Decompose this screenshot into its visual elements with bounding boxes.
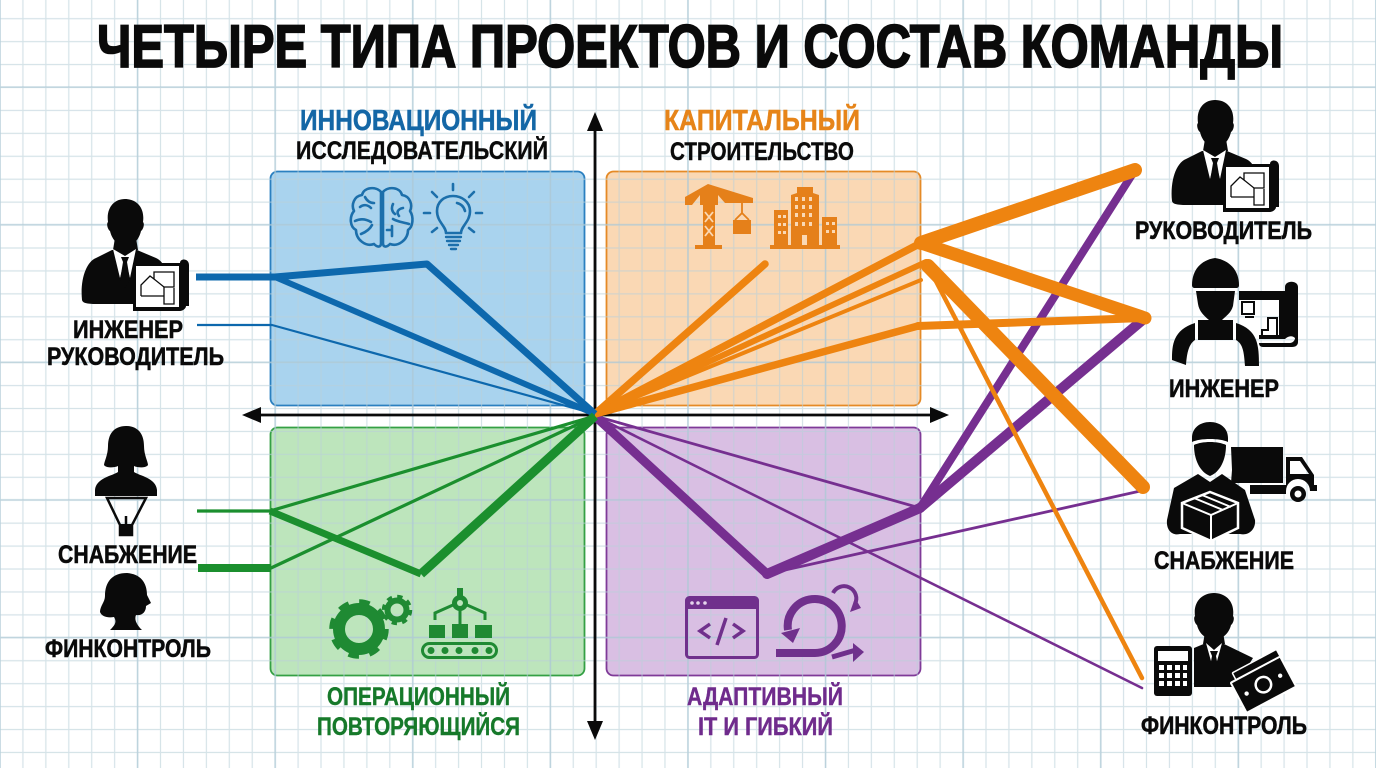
icon: light bulb bbox=[424, 184, 482, 249]
heading: capital quadrant: СТРОИТЕЛЬСТВО bbox=[670, 138, 854, 166]
icon: gears bbox=[332, 596, 410, 656]
heading: operational quadrant: ПОВТОРЯЮЩИЙСЯ bbox=[317, 711, 520, 741]
heading: adaptive quadrant bbox=[687, 681, 843, 741]
icon: right manager bbox=[1172, 100, 1279, 212]
horizontal axis bbox=[242, 407, 949, 423]
panel: operational quadrant bbox=[270, 428, 584, 676]
icon: construction crane bbox=[685, 184, 753, 249]
label: right engineer: ИНЖЕНЕР bbox=[1169, 375, 1279, 403]
label: left supply: СНАБЖЕНИЕ bbox=[58, 541, 197, 569]
icon: left supply woman with bulb bbox=[95, 426, 157, 535]
heading: adaptive quadrant: IT И ГИБКИЙ bbox=[698, 711, 833, 741]
heading: adaptive quadrant: АДАПТИВНЫЙ bbox=[687, 681, 843, 711]
icon: brain bbox=[351, 188, 412, 247]
panel: capital quadrant bbox=[606, 172, 920, 406]
heading: innovative quadrant bbox=[296, 103, 548, 165]
icon: left engineer manager bbox=[82, 199, 189, 311]
vertical axis bbox=[587, 112, 603, 740]
lines: adaptive connections bbox=[595, 170, 1145, 688]
panel: innovative quadrant bbox=[270, 172, 584, 406]
icon: conveyor robot bbox=[422, 588, 496, 658]
lines: operational connections bbox=[197, 416, 595, 574]
label: left engineer manager: РУКОВОДИТЕЛЬ bbox=[47, 343, 224, 371]
icon: code window bbox=[686, 598, 758, 658]
heading: innovative quadrant: ИССЛЕДОВАТЕЛЬСКИЙ bbox=[296, 135, 548, 165]
heading: operational quadrant bbox=[317, 681, 520, 741]
label: right manager: РУКОВОДИТЕЛЬ bbox=[1135, 217, 1312, 245]
label: left engineer manager: ИНЖЕНЕР bbox=[73, 316, 183, 344]
lines: capital connections bbox=[595, 170, 1145, 678]
label: left engineer manager bbox=[47, 316, 224, 371]
heading: operational quadrant: ОПЕРАЦИОННЫЙ bbox=[327, 681, 510, 711]
heading: capital quadrant bbox=[664, 103, 860, 166]
label: left finance: ФИНКОНТРОЛЬ bbox=[45, 635, 211, 663]
icon: agile loop bbox=[776, 586, 864, 662]
icon: buildings bbox=[770, 187, 840, 249]
heading: capital quadrant: КАПИТАЛЬНЫЙ bbox=[664, 103, 860, 137]
label: right supply: СНАБЖЕНИЕ bbox=[1154, 547, 1294, 575]
icon: left finance woman bbox=[100, 573, 151, 630]
heading: innovative quadrant: ИННОВАЦИОННЫЙ bbox=[300, 103, 537, 137]
icon: right engineer bbox=[1172, 258, 1298, 366]
panel: adaptive quadrant bbox=[606, 428, 920, 676]
label: right finance: ФИНКОНТРОЛЬ bbox=[1141, 712, 1307, 740]
lines: innovative connections bbox=[196, 264, 595, 414]
icon: right finance bbox=[1154, 593, 1296, 713]
icon: right supply courier bbox=[1167, 422, 1317, 541]
